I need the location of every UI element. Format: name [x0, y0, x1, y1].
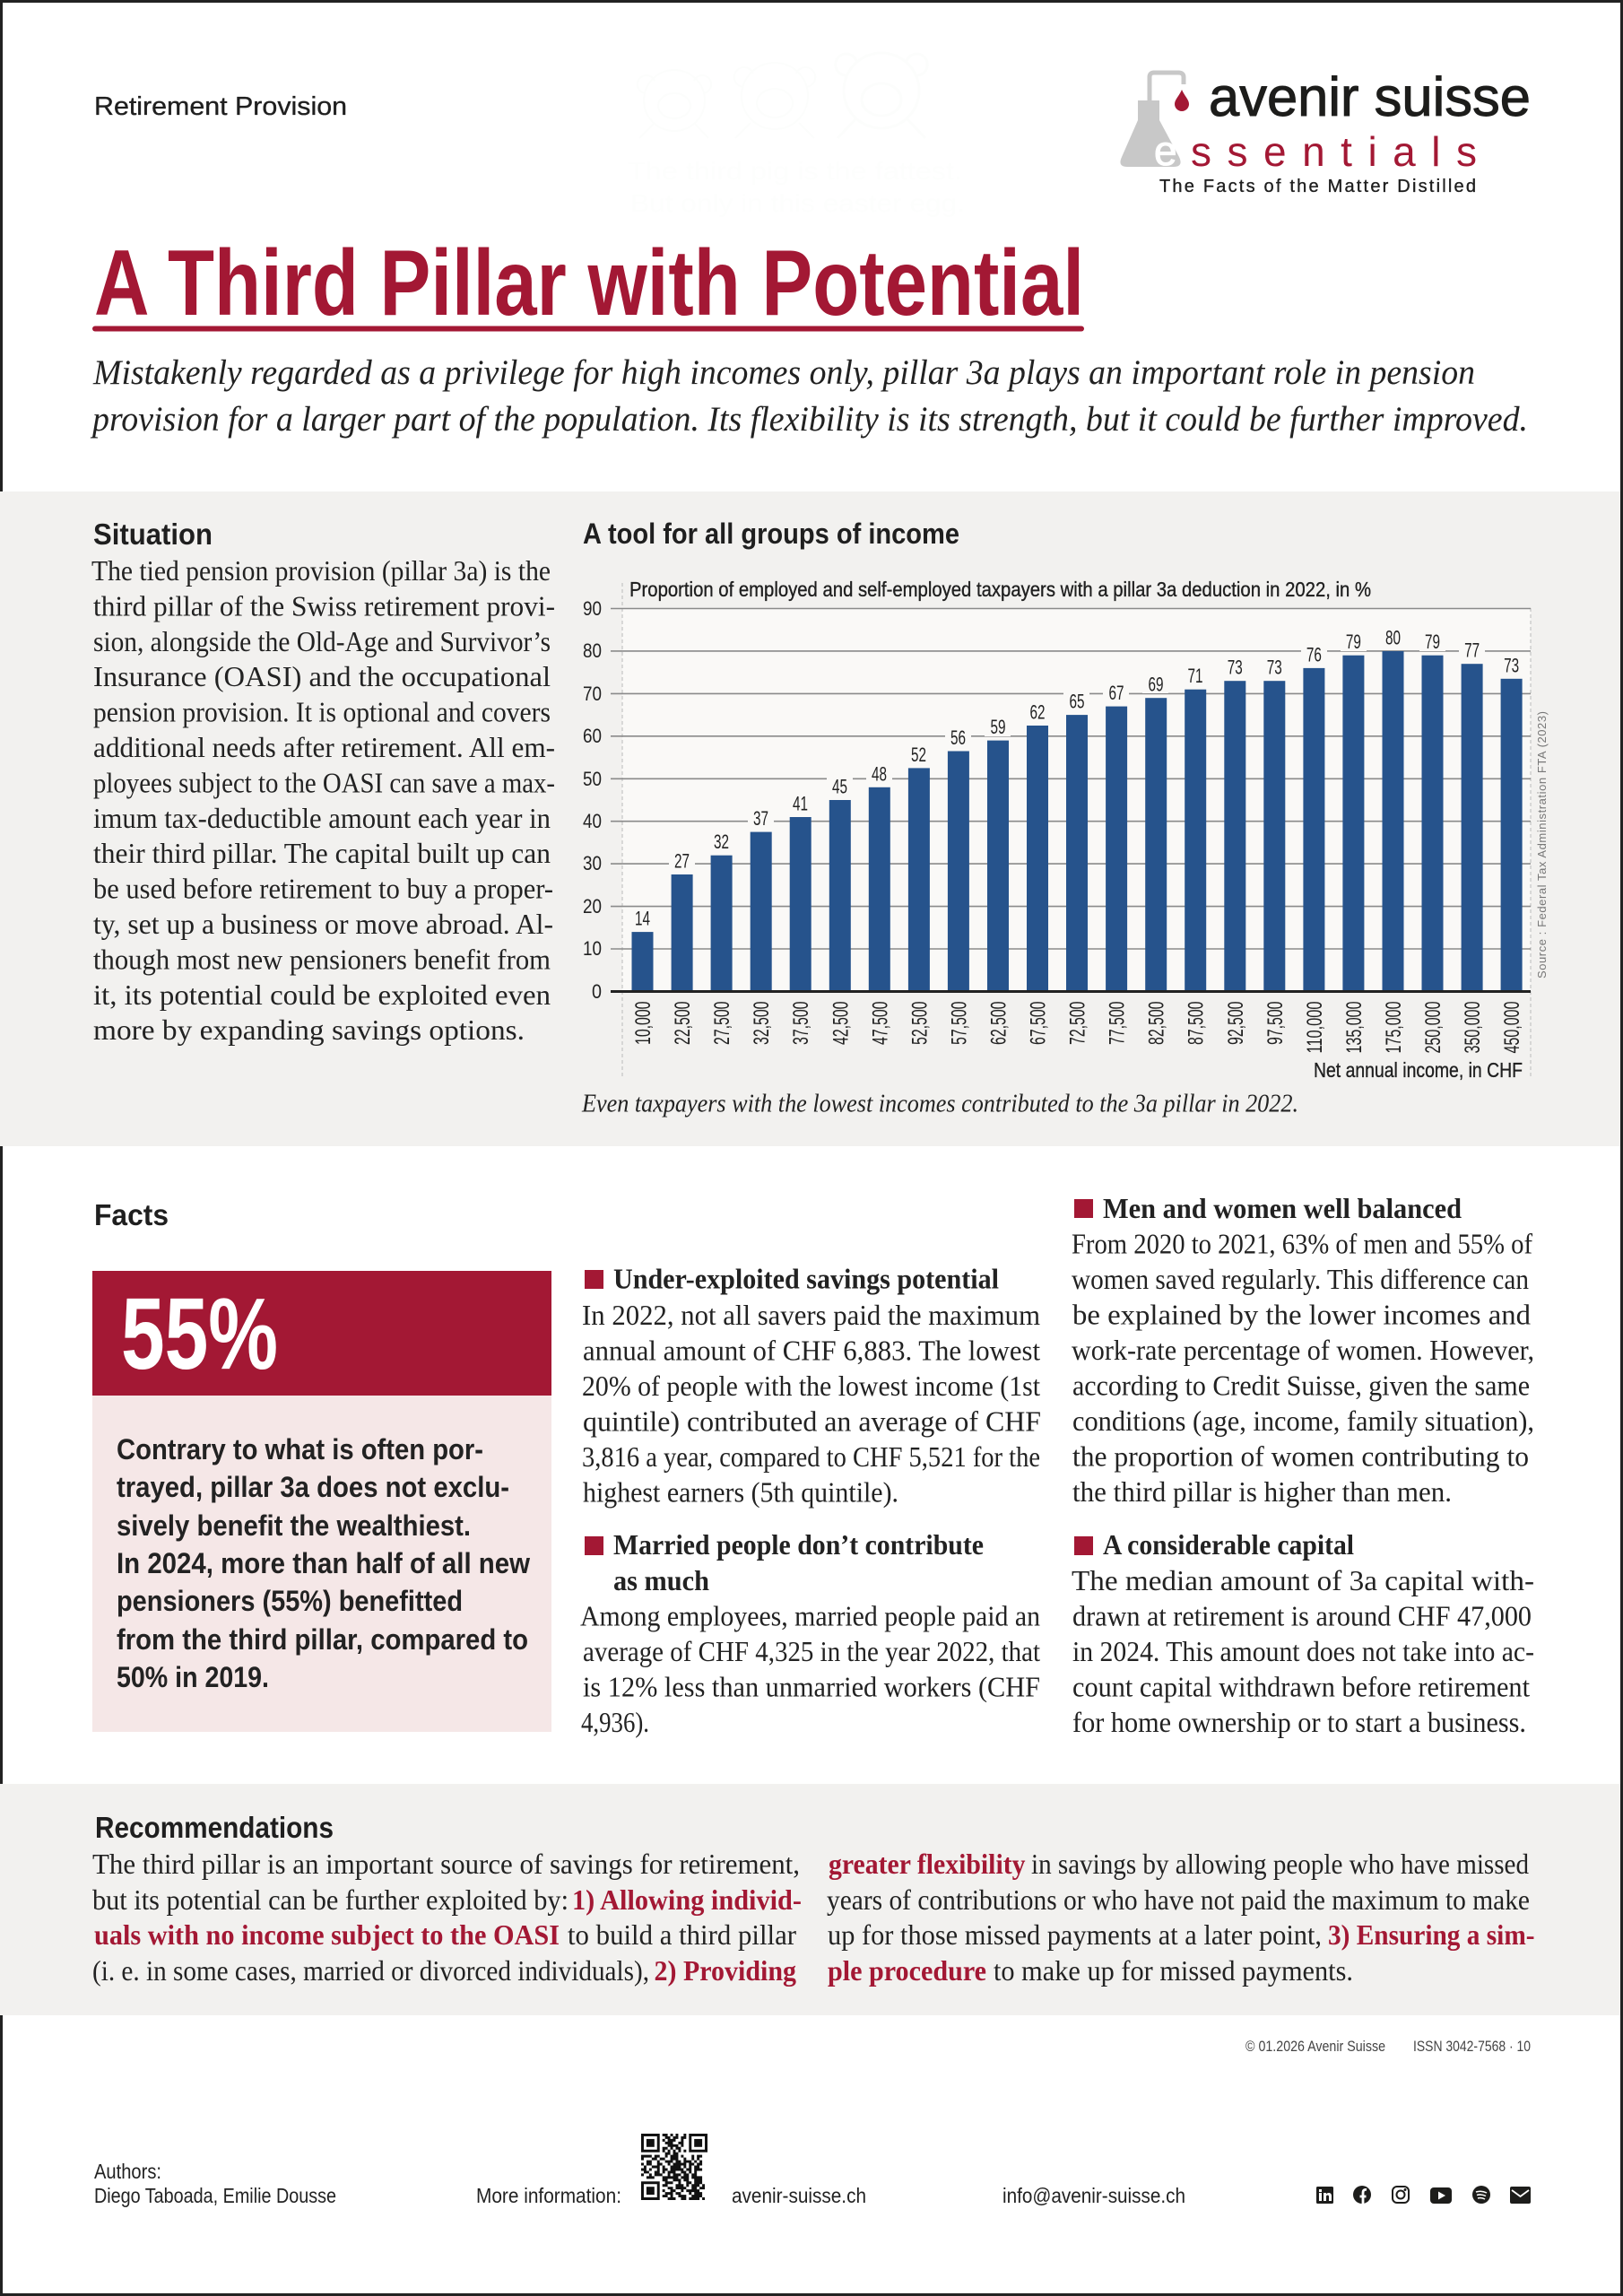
fact: under-exploited savings potential: In 2022, not all savers paid the maximum	[582, 1299, 1040, 1331]
value labels: 76	[1306, 643, 1322, 665]
text block: situation body	[91, 554, 555, 1046]
authors: Diego Taboada, Emilie Dousse	[94, 2184, 336, 2207]
fact: married people: Among employees, married people paid an	[580, 1600, 1040, 1632]
fact: a considerable capital: for home ownership or to start a business.	[1072, 1706, 1526, 1738]
x axis labels: 67,500	[1026, 1001, 1051, 1045]
fact: married people: average of CHF 4,325 in the year 2022, that	[583, 1635, 1040, 1667]
value labels: 37	[753, 807, 768, 830]
text block: recommendations left column: 1) Allowing individ-	[572, 1883, 802, 1916]
callout text: 50% in 2019.	[117, 1661, 269, 1693]
fact: men and women well balanced: be explained by the lower incomes and	[1072, 1299, 1531, 1331]
text block: recommendations left column: (i. e. in some cases, married or divorced individuals),	[92, 1954, 649, 1987]
text block: recommendations right column: ple procedure	[828, 1954, 986, 1987]
text block: recommendations left column: 2) Providing	[655, 1954, 796, 1987]
x axis labels: 62,500	[986, 1001, 1011, 1045]
fact: a considerable capital: A considerable capital	[1103, 1528, 1354, 1561]
authors	[94, 2160, 336, 2207]
fact: married people: Married people don’t contribute	[613, 1528, 984, 1561]
email: info@avenir-suisse.ch	[1002, 2184, 1185, 2207]
x axis labels: 82,500	[1145, 1001, 1169, 1045]
text block: situation body: their third pillar. The capital built up can	[93, 837, 551, 869]
value labels	[635, 626, 1519, 930]
fact: under-exploited savings potential: highest earners (5th quintile).	[583, 1476, 898, 1509]
y axis labels	[583, 597, 602, 1003]
social icons	[1316, 2186, 1531, 2204]
x axis labels: 350,000	[1461, 1001, 1485, 1053]
x axis labels: 72,500	[1065, 1001, 1090, 1045]
value labels: 27	[674, 850, 690, 872]
x axis labels: 110,000	[1303, 1002, 1327, 1053]
text block: recommendations right column: years of contributions or who have not paid the maximum to make	[827, 1883, 1530, 1916]
x axis labels: 135,000	[1342, 1001, 1367, 1053]
fact: men and women well balanced: conditions (age, income, family situation),	[1072, 1405, 1534, 1437]
x axis labels	[631, 1001, 1524, 1053]
value labels: 69	[1148, 674, 1164, 696]
fact: under-exploited savings potential: Under-exploited savings potential	[613, 1263, 999, 1295]
fact: a considerable capital: in 2024. This amount does not take into ac-	[1072, 1635, 1534, 1667]
text block: recommendations right column	[827, 1848, 1535, 1987]
y axis labels: 0	[592, 980, 602, 1003]
faint easter egg: three pigs and hidden text: But only in this easter egg.	[630, 189, 965, 217]
chart subtitle: Proportion of employed and self-employed taxpayers with a pillar 3a deduction in 2022, in %	[629, 578, 1371, 601]
y axis labels: 50	[583, 768, 602, 790]
value labels: 59	[990, 716, 1006, 738]
x axis labels: 42,500	[829, 1001, 853, 1045]
value labels: 41	[793, 793, 808, 814]
fact: married people: as much	[613, 1564, 709, 1596]
value labels: 73	[1267, 657, 1282, 679]
fact: men and women well balanced: Men and women well balanced	[1103, 1192, 1462, 1224]
text block: recommendations right column: greater flexibility	[829, 1848, 1026, 1880]
text block: recommendations left column: but its potential can be further exploited by:	[92, 1883, 568, 1916]
callout text: pensioners (55%) benefitted	[117, 1585, 463, 1617]
x axis labels: 77,500	[1106, 1001, 1130, 1045]
icon: instagram	[1393, 2187, 1409, 2203]
value labels: 65	[1069, 691, 1085, 713]
subtitle: provision for a larger part of the population. Its flexibility is its strength, but it could be further improved.	[90, 400, 1528, 439]
y axis labels: 60	[583, 725, 602, 747]
text block: recommendations right column: up for those missed payments at a later point,	[828, 1918, 1322, 1951]
value labels: 56	[950, 726, 966, 749]
icon: linkedin	[1316, 2187, 1333, 2204]
y axis labels: 20	[583, 895, 602, 918]
text block: situation body: third pillar of the Swiss retirement provi-	[93, 589, 555, 622]
icon: QR code	[641, 2135, 707, 2199]
axis baseline	[611, 990, 1531, 993]
fact: men and women well balanced: work-rate percentage of women. However,	[1072, 1334, 1534, 1366]
x axis labels: 22,500	[671, 1001, 695, 1045]
fact: a considerable capital: drawn at retirement is around CHF 47,000	[1072, 1600, 1532, 1632]
heading: Recommendations: Recommendations	[95, 1811, 334, 1844]
fact: a considerable capital: The median amount of 3a capital with-	[1072, 1564, 1534, 1596]
callout text: from the third pillar, compared to	[117, 1623, 528, 1656]
logo: avenir suisse essentials: e	[1154, 127, 1177, 174]
fact: married people	[580, 1528, 1040, 1738]
y axis labels: 30	[583, 852, 602, 874]
panel: recommendations	[0, 1784, 1620, 2015]
heading: Facts: Facts	[94, 1198, 169, 1231]
y axis labels: 70	[583, 683, 602, 705]
fact: under-exploited savings potential: annual amount of CHF 6,883. The lowest	[583, 1335, 1040, 1367]
text block: recommendations left column: uals with no income subject to the OASI	[94, 1918, 560, 1951]
more information label: More information:	[476, 2184, 621, 2207]
x axis labels: 92,500	[1224, 1001, 1248, 1045]
logo: avenir suisse essentials: ssentials	[1191, 128, 1477, 175]
panel: situation and chart background	[0, 491, 1620, 1146]
value labels: 14	[635, 908, 650, 930]
subtitle: Mistakenly regarded as a privilege for high incomes only, pillar 3a plays an important role in pension	[92, 353, 1475, 392]
text block: situation body: ployees subject to the OASI can save a max-	[93, 766, 555, 798]
icon: youtube	[1430, 2187, 1452, 2204]
x axis labels: 10,000	[631, 1001, 655, 1045]
text block: situation body: pension provision. It is optional and covers	[93, 696, 551, 728]
value labels: 67	[1108, 682, 1124, 704]
bar chart	[583, 583, 1549, 1082]
x axis labels: 57,500	[947, 1001, 971, 1045]
faint easter egg: three pigs and hidden text: The third pig is the fattest.	[628, 157, 962, 185]
heading: Situation: Situation	[93, 517, 213, 551]
text block: situation body: additional needs after retirement. All em-	[93, 731, 555, 763]
fact: married people: 4,936).	[581, 1706, 649, 1738]
value labels: 80	[1385, 626, 1401, 649]
x axis labels: 32,500	[750, 1001, 774, 1045]
x axis labels: 450,000	[1500, 1001, 1524, 1053]
value labels: 45	[832, 775, 847, 798]
y axis labels: 40	[583, 810, 602, 832]
value labels: 79	[1425, 631, 1440, 653]
callout text: sively benefit the wealthiest.	[117, 1509, 471, 1542]
y axis labels: 90	[583, 597, 602, 620]
icon: facebook	[1353, 2186, 1371, 2204]
text block: situation body: be used before retirement to buy a proper-	[93, 873, 553, 905]
logo: avenir suisse essentials: The Facts of the Matter Distilled	[1159, 177, 1476, 196]
callout: 55%: 55%	[121, 1277, 278, 1390]
fact: men and women well balanced: women saved regularly. This difference can	[1072, 1263, 1529, 1295]
icon: distillation flask	[1120, 73, 1184, 167]
text block: situation body: sion, alongside the Old-Age and Survivor’s	[93, 625, 551, 657]
fact: under-exploited savings potential	[582, 1263, 1041, 1509]
icon: red drop	[1175, 90, 1189, 111]
fact: men and women well balanced: the proportion of women contributing to	[1072, 1440, 1529, 1473]
value labels: 71	[1187, 665, 1203, 687]
x axis labels: 47,500	[868, 1001, 892, 1045]
panel: situation	[91, 517, 555, 1046]
callout: 55%	[92, 1271, 551, 1732]
text block: recommendations right column: 3) Ensuring a sim-	[1328, 1918, 1535, 1951]
text block: situation body: Insurance (OASI) and the occupational	[93, 660, 551, 692]
text block: situation body: ty, set up a business or move abroad. Al-	[93, 908, 553, 940]
bars	[631, 651, 1523, 992]
text block: recommendations right column: in savings by allowing people who have missed	[1031, 1848, 1529, 1880]
text block: situation body: The tied pension provision (pillar 3a) is the	[91, 554, 551, 587]
fact: under-exploited savings potential: 20% of people with the lowest income (1st	[582, 1370, 1040, 1402]
text block: recommendations left column: to build a third pillar	[568, 1918, 796, 1951]
chart panel: a tool for all groups of income	[581, 517, 1549, 1118]
logo: avenir suisse essentials	[1120, 66, 1531, 196]
fact: under-exploited savings potential: 3,816 a year, compared to CHF 5,521 for the	[582, 1440, 1040, 1473]
x axis labels: 97,500	[1263, 1001, 1288, 1045]
copyright line: © 01.2026 Avenir Suisse	[1245, 2038, 1385, 2055]
y axis labels: 10	[583, 937, 602, 960]
fact: under-exploited savings potential: quintile) contributed an average of CHF	[583, 1405, 1041, 1437]
x axis labels: 250,000	[1421, 1001, 1445, 1053]
value labels: 62	[1029, 701, 1046, 723]
y axis labels: 80	[583, 639, 602, 662]
text block: recommendations left column: The third pillar is an important source of savings for retirement,	[92, 1848, 800, 1880]
icon: mail	[1510, 2187, 1531, 2204]
text block: recommendations right column: to make up for missed payments.	[994, 1954, 1353, 1987]
x axis labels: 175,000	[1382, 1001, 1406, 1053]
authors: Authors:	[94, 2160, 161, 2183]
value labels: 79	[1346, 631, 1361, 653]
source note: Source : Federal Tax Administration FTA (2023)	[1535, 711, 1549, 978]
text block: situation body: though most new pensioners benefit from	[93, 943, 551, 975]
text block: situation body: imum tax-deductible amount each year in	[93, 802, 551, 834]
fact: a considerable capital: count capital withdrawn before retirement	[1072, 1670, 1530, 1702]
fact: a considerable capital	[1072, 1528, 1534, 1738]
chart caption: Even taxpayers with the lowest incomes contributed to the 3a pillar in 2022.	[581, 1089, 1298, 1118]
fact: men and women well balanced	[1072, 1192, 1534, 1508]
copyright line: ISSN 3042-7568 · 10	[1413, 2038, 1531, 2055]
x axis labels: 52,500	[907, 1001, 932, 1045]
x axis title: Net annual income, in CHF	[1314, 1058, 1523, 1082]
website: avenir-suisse.ch	[732, 2184, 866, 2207]
text block: recommendations left column	[92, 1848, 802, 1987]
fact: men and women well balanced: according to Credit Suisse, given the same	[1072, 1369, 1530, 1401]
value labels: 32	[714, 831, 729, 853]
fact: men and women well balanced: the third pillar is higher than men.	[1072, 1475, 1452, 1508]
x axis labels: 37,500	[789, 1001, 813, 1045]
text block: situation body: more by expanding savings options.	[93, 1013, 525, 1046]
section label: Retirement Provision: Retirement Provision	[94, 92, 347, 121]
value labels: 77	[1464, 639, 1480, 662]
callout text	[117, 1433, 530, 1693]
heading: chart title: A tool for all groups of income	[583, 517, 959, 550]
subtitle	[90, 353, 1528, 439]
callout text: trayed, pillar 3a does not exclu-	[117, 1471, 509, 1503]
value labels: 52	[911, 744, 926, 766]
icon: spotify	[1472, 2186, 1490, 2204]
faint easter egg: three pigs and hidden text	[628, 53, 965, 217]
copyright line	[1245, 2038, 1531, 2055]
title: A Third Pillar with Potential	[94, 231, 1084, 335]
value label backgrounds	[629, 628, 1524, 927]
callout text: In 2024, more than half of all new	[117, 1547, 530, 1579]
logo: avenir suisse essentials: avenir suisse	[1209, 66, 1531, 127]
text block: situation body: it, its potential could be exploited even	[93, 978, 551, 1011]
value labels: 73	[1228, 657, 1243, 679]
x axis labels: 27,500	[710, 1001, 734, 1045]
value labels: 48	[872, 762, 887, 785]
x axis labels: 87,500	[1185, 1001, 1209, 1045]
fact: men and women well balanced: From 2020 to 2021, 63% of men and 55% of	[1072, 1227, 1532, 1259]
value labels: 73	[1504, 654, 1519, 676]
callout text: Contrary to what is often por-	[117, 1433, 483, 1465]
fact: married people: is 12% less than unmarried workers (CHF	[583, 1670, 1040, 1702]
